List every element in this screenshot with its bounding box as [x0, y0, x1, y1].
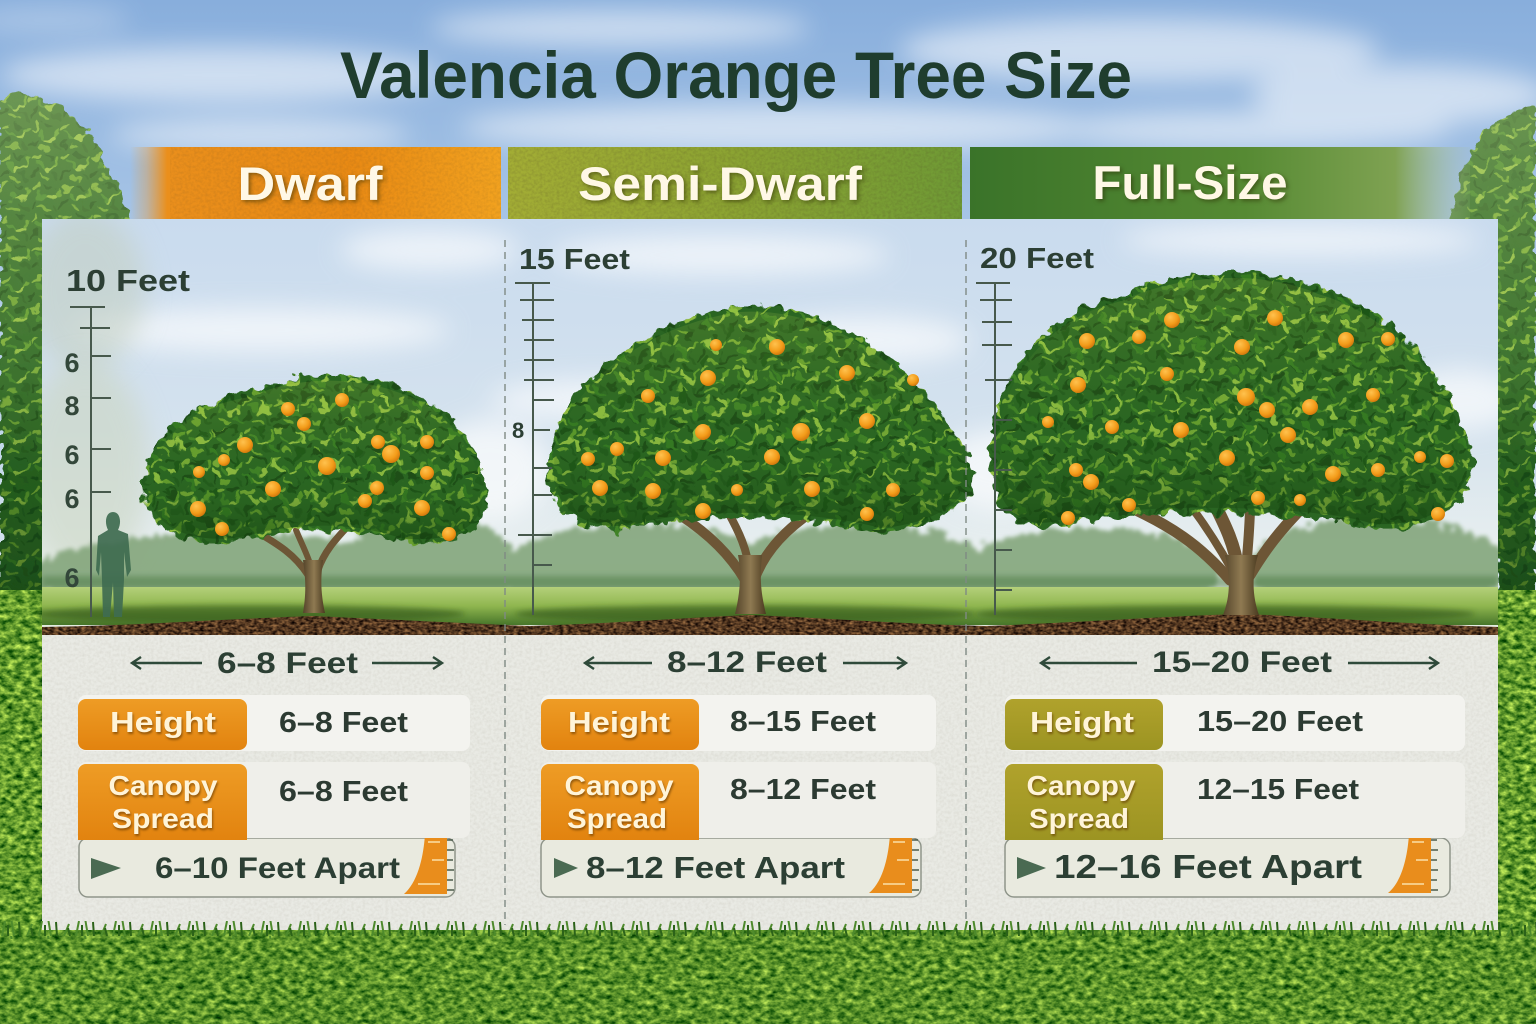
canopy row: dwarf: [78, 762, 470, 840]
column dividers: [505, 240, 966, 925]
icon: human silhouette: [96, 512, 131, 617]
canopy row: semi-dwarf: Canopy: [564, 770, 674, 801]
height scale: dwarf: [64, 263, 190, 617]
tree: dwarf: [142, 375, 488, 613]
height scale: dwarf: 6: [64, 440, 80, 470]
height row: semi-dwarf: [541, 695, 936, 751]
meadow strip: [42, 587, 1498, 625]
height scale: dwarf: 6: [64, 563, 80, 593]
height row: dwarf: 6–8 Feet: [279, 707, 408, 739]
spacing row: dwarf: [79, 834, 455, 897]
header: Full-Size: [970, 147, 1470, 219]
header: Semi-Dwarf: Semi-Dwarf: [578, 157, 862, 210]
title: Valencia Orange Tree Size: [340, 38, 1132, 112]
height row: full-size: [1005, 695, 1465, 751]
canopy row: dwarf: Canopy: [108, 770, 218, 801]
background: side trees: [0, 96, 1536, 600]
soil strip: [35, 605, 1498, 635]
panel: comparison board: [20, 210, 1520, 930]
header: Full-Size: Full-Size: [1092, 156, 1288, 209]
spacing row: semi-dwarf: [541, 834, 921, 897]
header: Dwarf: [130, 147, 501, 219]
background: lawn: [0, 590, 1536, 1024]
tree: semi-dwarf: [548, 306, 974, 614]
spacing row: semi-dwarf: 8–12 Feet Apart: [586, 850, 845, 885]
stats: full-size: [1005, 646, 1465, 897]
panel lower card: [42, 635, 1498, 930]
height row: semi-dwarf: Height: [568, 707, 670, 739]
distant hedge: [42, 518, 1498, 587]
height row: full-size: Height: [1030, 707, 1134, 739]
height row: dwarf: Height: [110, 707, 216, 739]
height scale: dwarf: 6: [64, 348, 80, 378]
height scale: semi-dwarf: 15 Feet: [519, 244, 630, 276]
canopy row: semi-dwarf: 8–12 Feet: [730, 774, 876, 806]
canopy row: full-size: Canopy: [1026, 770, 1136, 801]
icon: ruler: [869, 834, 919, 893]
icon: ruler: [1388, 834, 1438, 893]
spacing row: full-size: [1005, 834, 1450, 897]
canopy width: semi-dwarf: 8–12 Feet: [667, 646, 827, 679]
oranges: semi-dwarf: [581, 339, 919, 521]
canopy width: dwarf: 6–8 Feet: [217, 647, 358, 680]
canopy row: full-size: 12–15 Feet: [1197, 774, 1359, 806]
oranges: full-size: [1042, 310, 1454, 525]
height row: full-size: 15–20 Feet: [1197, 706, 1363, 738]
canopy row: semi-dwarf: Spread: [567, 803, 667, 834]
height scale: dwarf: 6: [64, 484, 80, 514]
background: sky and clouds: [0, 0, 1536, 620]
height scale: semi-dwarf: [512, 244, 630, 615]
canopy width: full-size: [1041, 646, 1438, 679]
grass blades over panel edge: [0, 921, 1536, 939]
stats: semi-dwarf: [541, 646, 936, 897]
tree: full-size: [990, 272, 1473, 615]
panel sky wash: [20, 210, 1520, 635]
canopy row: full-size: [1005, 762, 1465, 840]
height row: dwarf: [78, 695, 470, 751]
stats: dwarf: [78, 647, 470, 897]
header: Dwarf: Dwarf: [238, 157, 383, 210]
canopy row: full-size: Spread: [1029, 803, 1129, 834]
height scale: dwarf: 8: [64, 391, 80, 421]
canopy row: dwarf: Spread: [112, 803, 214, 834]
spacing row: full-size: 12–16 Feet Apart: [1054, 848, 1362, 885]
canopy row: semi-dwarf: [541, 762, 936, 840]
header: Semi-Dwarf: [508, 147, 962, 219]
canopy width: semi-dwarf: [585, 646, 906, 679]
height scale: semi-dwarf: 8: [512, 418, 524, 443]
height scale: dwarf: 10 Feet: [66, 263, 190, 298]
height scale: full-size: 20 Feet: [980, 243, 1094, 275]
spacing row: dwarf: 6–10 Feet Apart: [155, 852, 400, 885]
canopy width: full-size: 15–20 Feet: [1152, 646, 1332, 679]
height row: semi-dwarf: 8–15 Feet: [730, 706, 876, 738]
canopy row: dwarf: 6–8 Feet: [279, 776, 408, 808]
column headers: [130, 147, 1470, 219]
canopy width: dwarf: [132, 647, 442, 680]
height scale: full-size: [976, 243, 1094, 615]
icon: ruler: [404, 834, 454, 894]
oranges: dwarf: [190, 393, 456, 541]
